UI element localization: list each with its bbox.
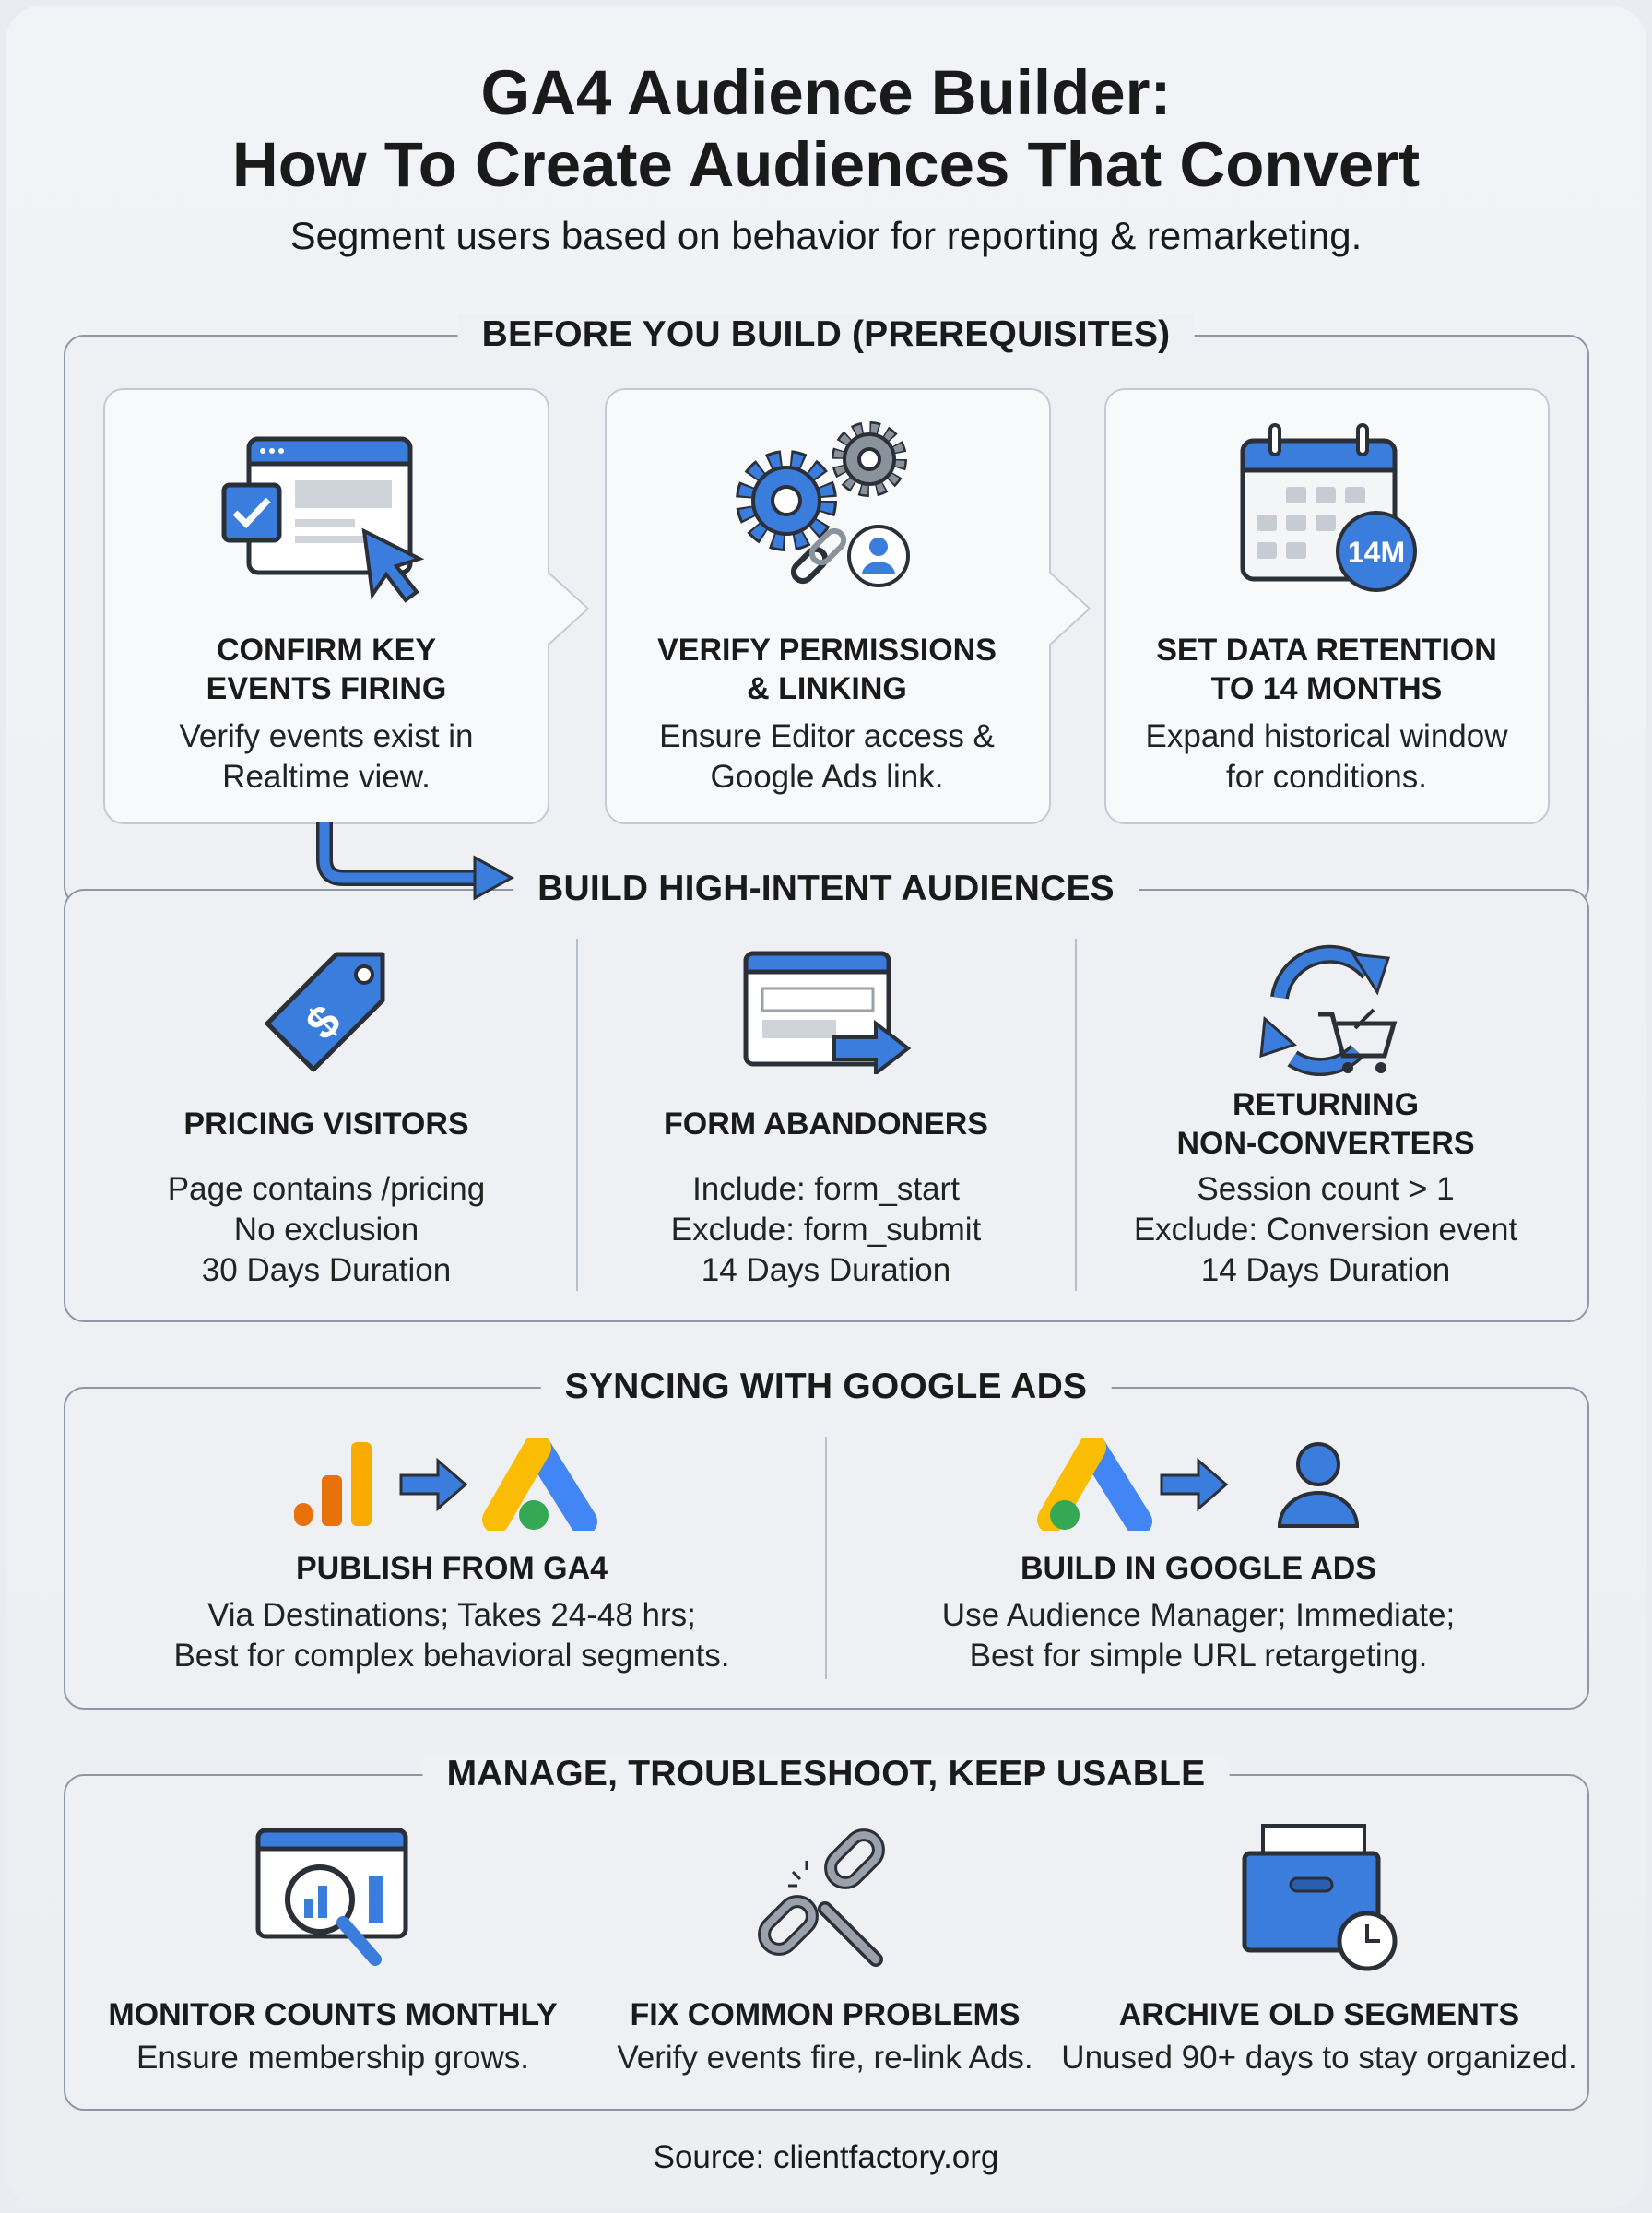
text: audience definitions: No exclusion xyxy=(234,1212,419,1248)
text: audience definitions: FORM ABANDONERS xyxy=(664,1106,988,1142)
icon: GA4 to Ads xyxy=(294,1438,597,1531)
text: manage items: ARCHIVE OLD SEGMENTS xyxy=(1119,1997,1519,2032)
arrow: chevron card2 to card3 xyxy=(1049,572,1092,645)
text: card titles and descriptions: Realtime view. xyxy=(222,759,431,795)
text: card titles and descriptions: Verify events exist in xyxy=(179,718,474,754)
text: manage items: Ensure membership grows. xyxy=(136,2040,529,2076)
text: manage items: Unused 90+ days to stay organized. xyxy=(1061,2040,1577,2076)
text: sync options: Via Destinations; Takes 24-48 hrs; xyxy=(207,1597,696,1633)
heading: build high-intent: BUILD HIGH-INTENT AUDIENCES xyxy=(537,869,1115,908)
title: GA4 Audience Builder: xyxy=(481,57,1171,128)
icon: browser checkbox cursor xyxy=(221,437,424,603)
text: audience definitions: RETURNING xyxy=(1233,1087,1419,1122)
icon: price tag xyxy=(266,952,385,1071)
title xyxy=(232,57,1420,200)
heading: before you build: BEFORE YOU BUILD (PREREQUISITES) xyxy=(482,314,1170,354)
icon: broken link xyxy=(758,1828,885,1967)
panel: syncing xyxy=(64,1387,1589,1710)
panel: build audiences xyxy=(64,889,1589,1322)
heading: syncing: SYNCING WITH GOOGLE ADS xyxy=(565,1367,1087,1406)
text: sync options: Use Audience Manager; Immediate; xyxy=(942,1597,1455,1633)
text: audience definitions: 14 Days Duration xyxy=(702,1252,950,1288)
text: card titles and descriptions: EVENTS FIRING xyxy=(206,671,446,706)
footer: source: Source: clientfactory.org xyxy=(654,2139,998,2175)
icon: calendar 14M: 14M xyxy=(1348,536,1405,569)
text: audience definitions: 30 Days Duration xyxy=(202,1252,451,1288)
text: audience definitions: PRICING VISITORS xyxy=(183,1106,469,1142)
text: audience definitions: Session count > 1 xyxy=(1197,1171,1455,1207)
text: card titles and descriptions: SET DATA RETENTION xyxy=(1156,633,1497,668)
text: sync options: PUBLISH FROM GA4 xyxy=(296,1551,608,1586)
icon: cycle cart xyxy=(1259,944,1398,1076)
text: card titles and descriptions: for conditions. xyxy=(1226,759,1427,795)
icon: calendar 14M xyxy=(1241,423,1417,592)
text: card titles and descriptions: & LINKING xyxy=(747,671,907,706)
icon: price tag: $ xyxy=(296,995,350,1049)
text: audience definitions xyxy=(168,1087,1517,1288)
text: card titles and descriptions: Google Ads link. xyxy=(711,759,943,795)
text: card titles and descriptions: CONFIRM KEY xyxy=(217,633,436,668)
text: card titles and descriptions: TO 14 MONTHS xyxy=(1211,671,1442,706)
text: card titles and descriptions xyxy=(179,633,1508,795)
icon: form arrow xyxy=(743,952,911,1074)
text: audience definitions: Include: form_start xyxy=(692,1171,960,1207)
card: data retention xyxy=(1104,388,1550,824)
text: audience definitions: Exclude: form_submit xyxy=(671,1212,981,1248)
text: sync options: BUILD IN GOOGLE ADS xyxy=(1021,1551,1376,1586)
text: card titles and descriptions: VERIFY PERMISSIONS xyxy=(657,633,997,668)
subtitle: Segment users based on behavior for reporting & remarketing. xyxy=(290,214,1362,257)
heading: manage: MANAGE, TROUBLESHOOT, KEEP USABLE xyxy=(447,1754,1205,1793)
icon: gears link user xyxy=(736,421,910,587)
text: audience definitions: NON-CONVERTERS xyxy=(1176,1126,1475,1161)
card: verify permissions xyxy=(605,388,1051,824)
text: card titles and descriptions: Ensure Editor access & xyxy=(659,718,995,754)
text: sync options: Best for complex behavioral segments. xyxy=(173,1638,730,1674)
card: confirm key events xyxy=(103,388,549,824)
text: sync options: Best for simple URL retargeting. xyxy=(970,1638,1427,1674)
text: audience definitions: Page contains /pricing xyxy=(168,1171,485,1207)
icon: Ads to user xyxy=(1037,1438,1359,1531)
panel: manage xyxy=(64,1774,1589,2111)
text: manage items: Verify events fire, re-link Ads. xyxy=(617,2040,1033,2076)
text: audience definitions: 14 Days Duration xyxy=(1201,1252,1450,1288)
text: manage items: MONITOR COUNTS MONTHLY xyxy=(108,1997,558,2032)
title: How To Create Audiences That Convert xyxy=(232,129,1420,200)
icon: monitor magnifier xyxy=(256,1828,407,1966)
text: audience definitions: Exclude: Conversion event xyxy=(1134,1212,1517,1248)
text: sync options xyxy=(173,1551,1455,1674)
arrow: chevron card1 to card2 xyxy=(548,572,590,645)
text: manage items xyxy=(108,1997,1577,2076)
text: card titles and descriptions: Expand historical window xyxy=(1146,718,1507,754)
icon: archive box clock xyxy=(1243,1824,1398,1971)
text: manage items: FIX COMMON PROBLEMS xyxy=(630,1997,1021,2032)
arrow: blue elbow xyxy=(316,822,514,900)
panel: prerequisites xyxy=(64,335,1589,906)
